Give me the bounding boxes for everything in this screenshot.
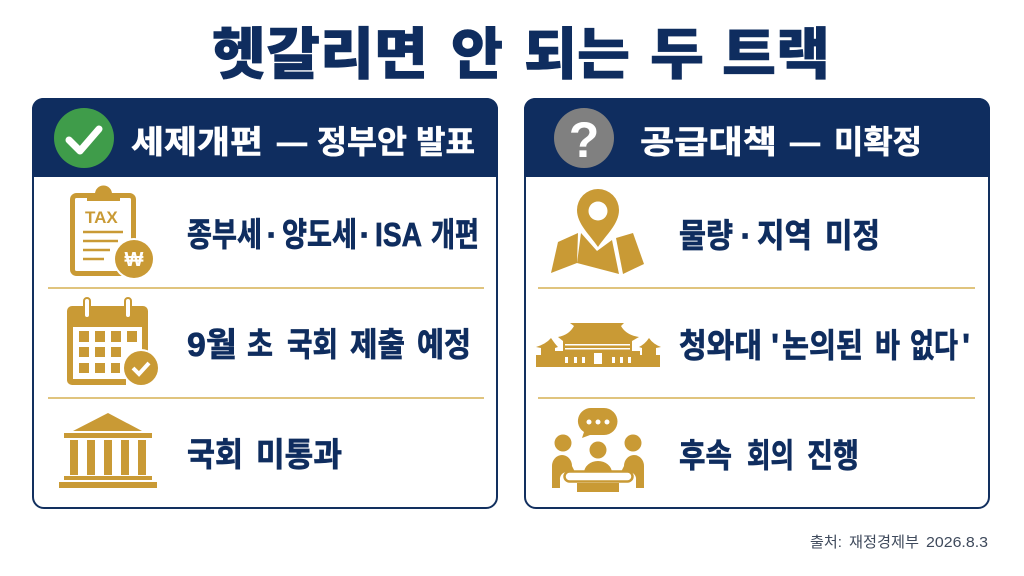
icon: calendar <box>67 298 160 387</box>
item text: Blue House statement: ' <box>962 327 970 364</box>
icon: question mark: ? <box>569 112 599 168</box>
item text: follow-up meetings: 진행 <box>807 437 859 474</box>
title: 되는 <box>524 23 630 86</box>
panel: supply measures <box>524 98 990 508</box>
item text: not passed: 미통과 <box>256 436 342 473</box>
item text: Blue House statement: 논의된 <box>782 327 863 364</box>
item text: tax items: · <box>360 216 370 253</box>
source: 2026.8.3 <box>926 534 988 551</box>
item text: schedule: 국회 <box>287 326 338 363</box>
item text: Blue House statement: 없다 <box>910 327 958 364</box>
item text: schedule: 9월 <box>187 326 237 363</box>
item text: volume and region <box>679 217 880 254</box>
item text: schedule: 예정 <box>417 326 471 363</box>
item text: not passed <box>187 436 342 473</box>
item text: tax items <box>187 216 479 253</box>
item text: tax items: ISA <box>375 216 422 253</box>
item text: schedule: 초 <box>247 326 273 363</box>
title <box>212 23 830 86</box>
divider <box>48 287 484 289</box>
header text: tax reform: 발표 <box>416 124 475 160</box>
header text: tax reform: 정부안 <box>317 124 407 160</box>
icon: meeting <box>552 408 644 492</box>
icon: Blue House <box>536 323 661 367</box>
item text: volume and region: · <box>740 217 752 254</box>
divider <box>538 287 975 289</box>
item text: tax items: · <box>266 216 278 253</box>
header text: supply measures: 공급대책 <box>640 124 777 160</box>
divider <box>538 397 975 399</box>
source: 출처: <box>810 534 842 551</box>
item text: follow-up meetings: 후속 <box>679 437 732 474</box>
title: 헷갈리면 <box>212 23 428 86</box>
item text: follow-up meetings <box>679 437 859 474</box>
divider <box>48 397 484 399</box>
item text: schedule <box>187 326 471 363</box>
title: 트랙 <box>722 23 830 86</box>
item text: tax items: 개편 <box>431 216 479 253</box>
panel: tax reform <box>32 98 498 508</box>
item text: Blue House statement <box>679 327 970 364</box>
header text: tax reform: 세제개편 <box>131 124 263 160</box>
item text: volume and region: 물량 <box>679 217 733 254</box>
icon: parliament building <box>59 413 157 488</box>
header text: tax reform: — <box>277 124 307 160</box>
title: 안 <box>451 23 503 86</box>
item text: Blue House statement: ' <box>771 327 779 364</box>
header text: supply measures: — <box>790 124 820 160</box>
header text: supply measures: 미확정 <box>834 124 922 160</box>
item text: Blue House statement: 청와대 <box>679 327 762 364</box>
item text: schedule: 제출 <box>350 326 405 363</box>
item text: follow-up meetings: 회의 <box>747 437 794 474</box>
icon: question mark <box>554 108 614 168</box>
title: 두 <box>650 23 704 86</box>
item text: tax items: 종부세 <box>187 216 262 253</box>
item text: Blue House statement: 바 <box>875 327 900 364</box>
icon: tax clipboard: ₩ <box>125 249 144 271</box>
item text: volume and region: 미정 <box>825 217 880 254</box>
icon: map pin <box>551 189 644 274</box>
source: 재정경제부 <box>849 534 919 551</box>
item text: tax items: 양도세 <box>282 216 357 253</box>
header text: supply measures <box>640 124 922 160</box>
item text: not passed: 국회 <box>187 436 243 473</box>
panel header: tax reform <box>32 98 498 177</box>
icon: tax clipboard: TAX <box>85 208 118 227</box>
icon: tax clipboard <box>72 186 155 280</box>
panel header: supply measures <box>524 98 990 177</box>
header text: tax reform <box>131 124 475 160</box>
item text: volume and region: 지역 <box>757 217 812 254</box>
icon: green check <box>54 108 114 168</box>
source <box>810 534 988 551</box>
